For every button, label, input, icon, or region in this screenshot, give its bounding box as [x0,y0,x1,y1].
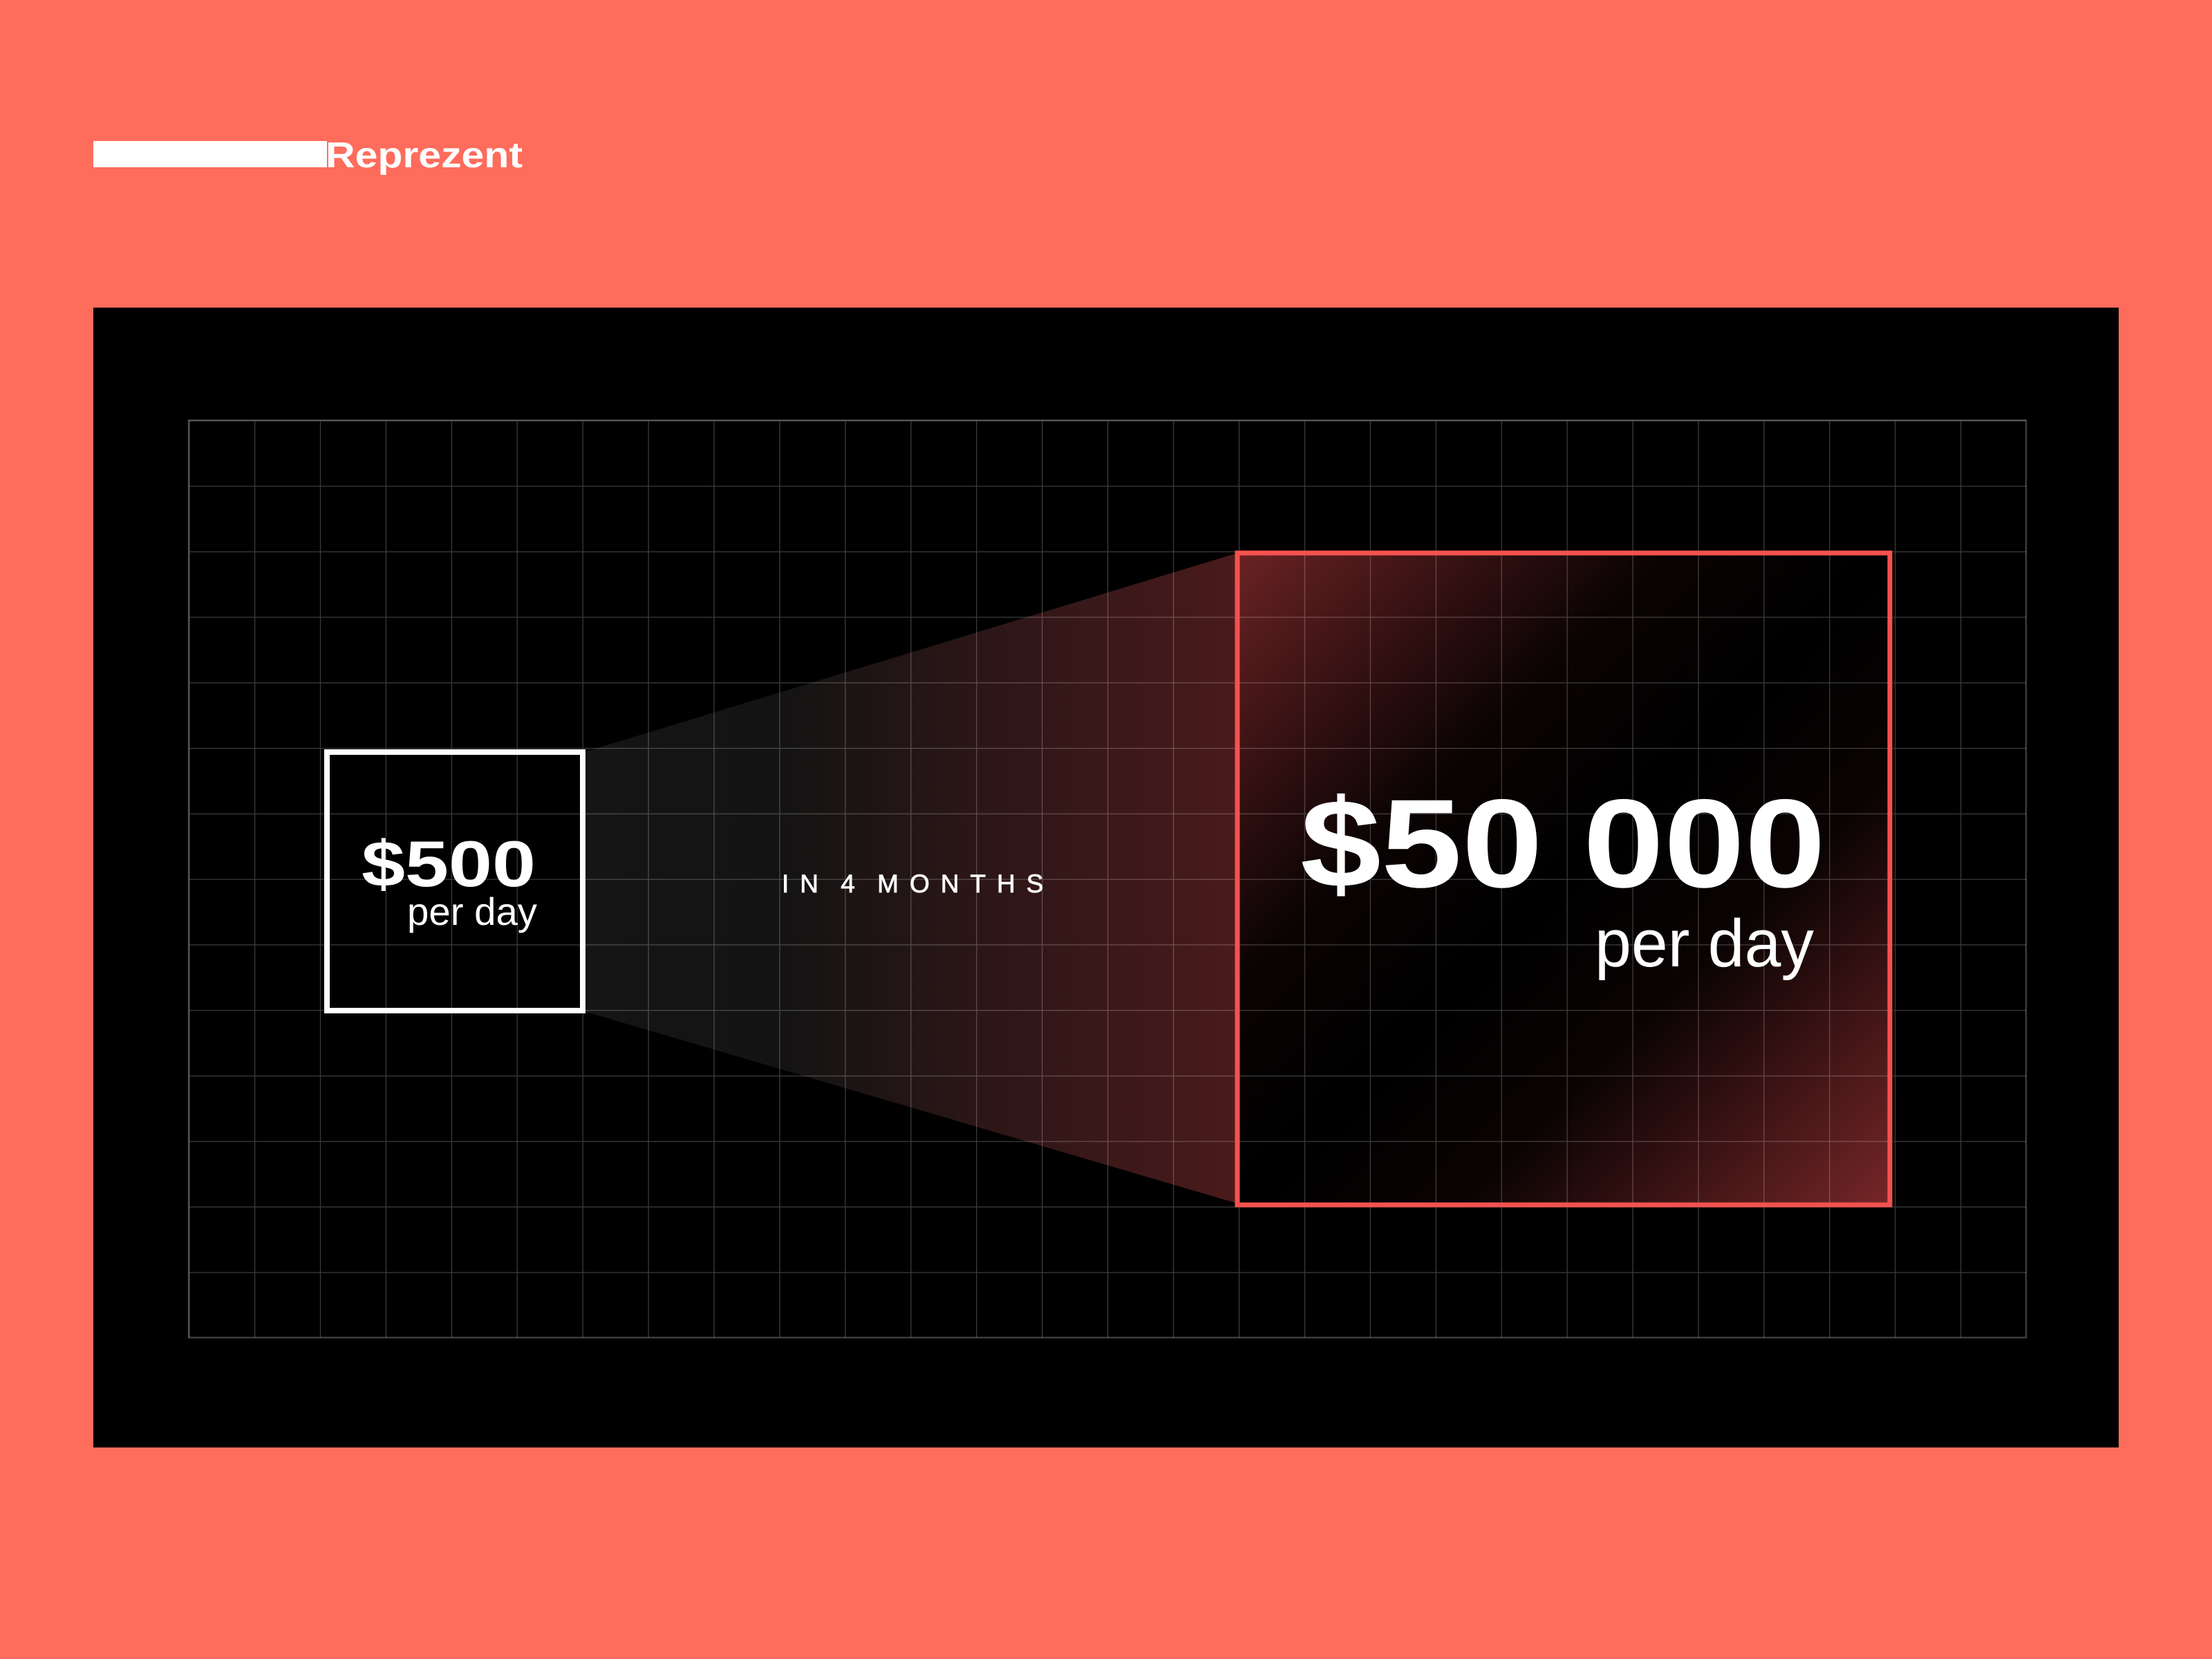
grid [189,420,2026,1338]
box: $50 000 per day: $50 000 [1300,773,1826,914]
logo: Reprezent: Reprezent [326,135,523,176]
box: $50 000 per day [1237,553,1890,1205]
box: $500 per day: per day [407,890,537,933]
box: $500 per day [327,752,583,1011]
logo: Reprezent [93,135,523,176]
big box fill [1237,553,1890,1205]
funnel: growth projection [584,553,1237,1203]
panel: black chart area [93,308,2119,1447]
box: $50 000 per day: per day [1595,906,1814,981]
box: $500 per day: $500 [362,827,536,900]
label: IN 4 MONTHS: IN 4 MONTHS [782,870,1054,898]
